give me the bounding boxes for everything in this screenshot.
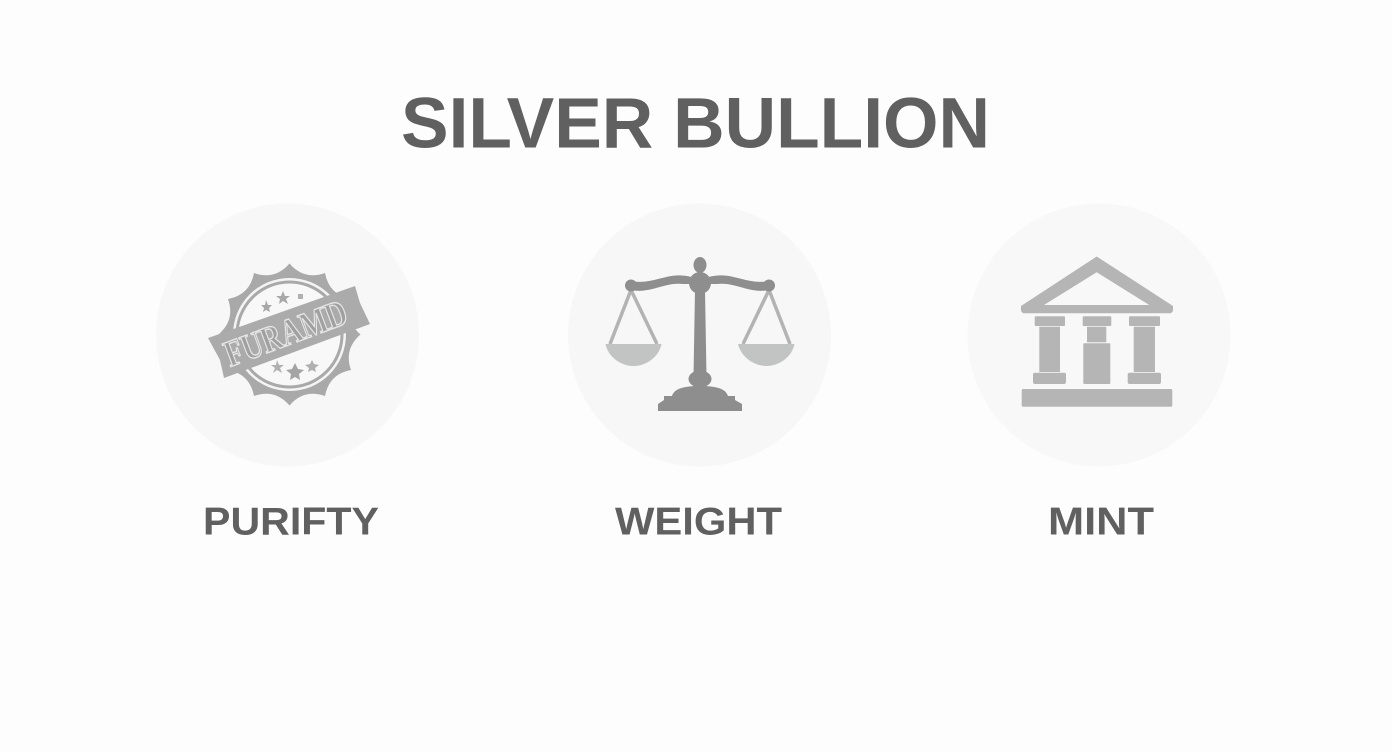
- icon background circle: mint: [968, 204, 1230, 466]
- label: weight: WEIGHT: [615, 500, 782, 544]
- icon: balance scale: [606, 257, 794, 411]
- icon background circle: weight: [568, 204, 831, 466]
- icon background circle: purity: [156, 204, 419, 466]
- label: mint: MINT: [1048, 500, 1154, 544]
- label: purity: PURIFTY: [203, 500, 379, 544]
- panel: mint: [968, 204, 1230, 544]
- stamp ribbon: [208, 286, 370, 378]
- icon: mint building: [1021, 256, 1173, 407]
- icon: stamp seal: [208, 264, 370, 406]
- panel: weight: [568, 204, 831, 544]
- stamp ribbon text: FURAMD: [219, 292, 353, 375]
- panel: purity: [156, 204, 419, 544]
- title: SILVER BULLION: [401, 84, 990, 164]
